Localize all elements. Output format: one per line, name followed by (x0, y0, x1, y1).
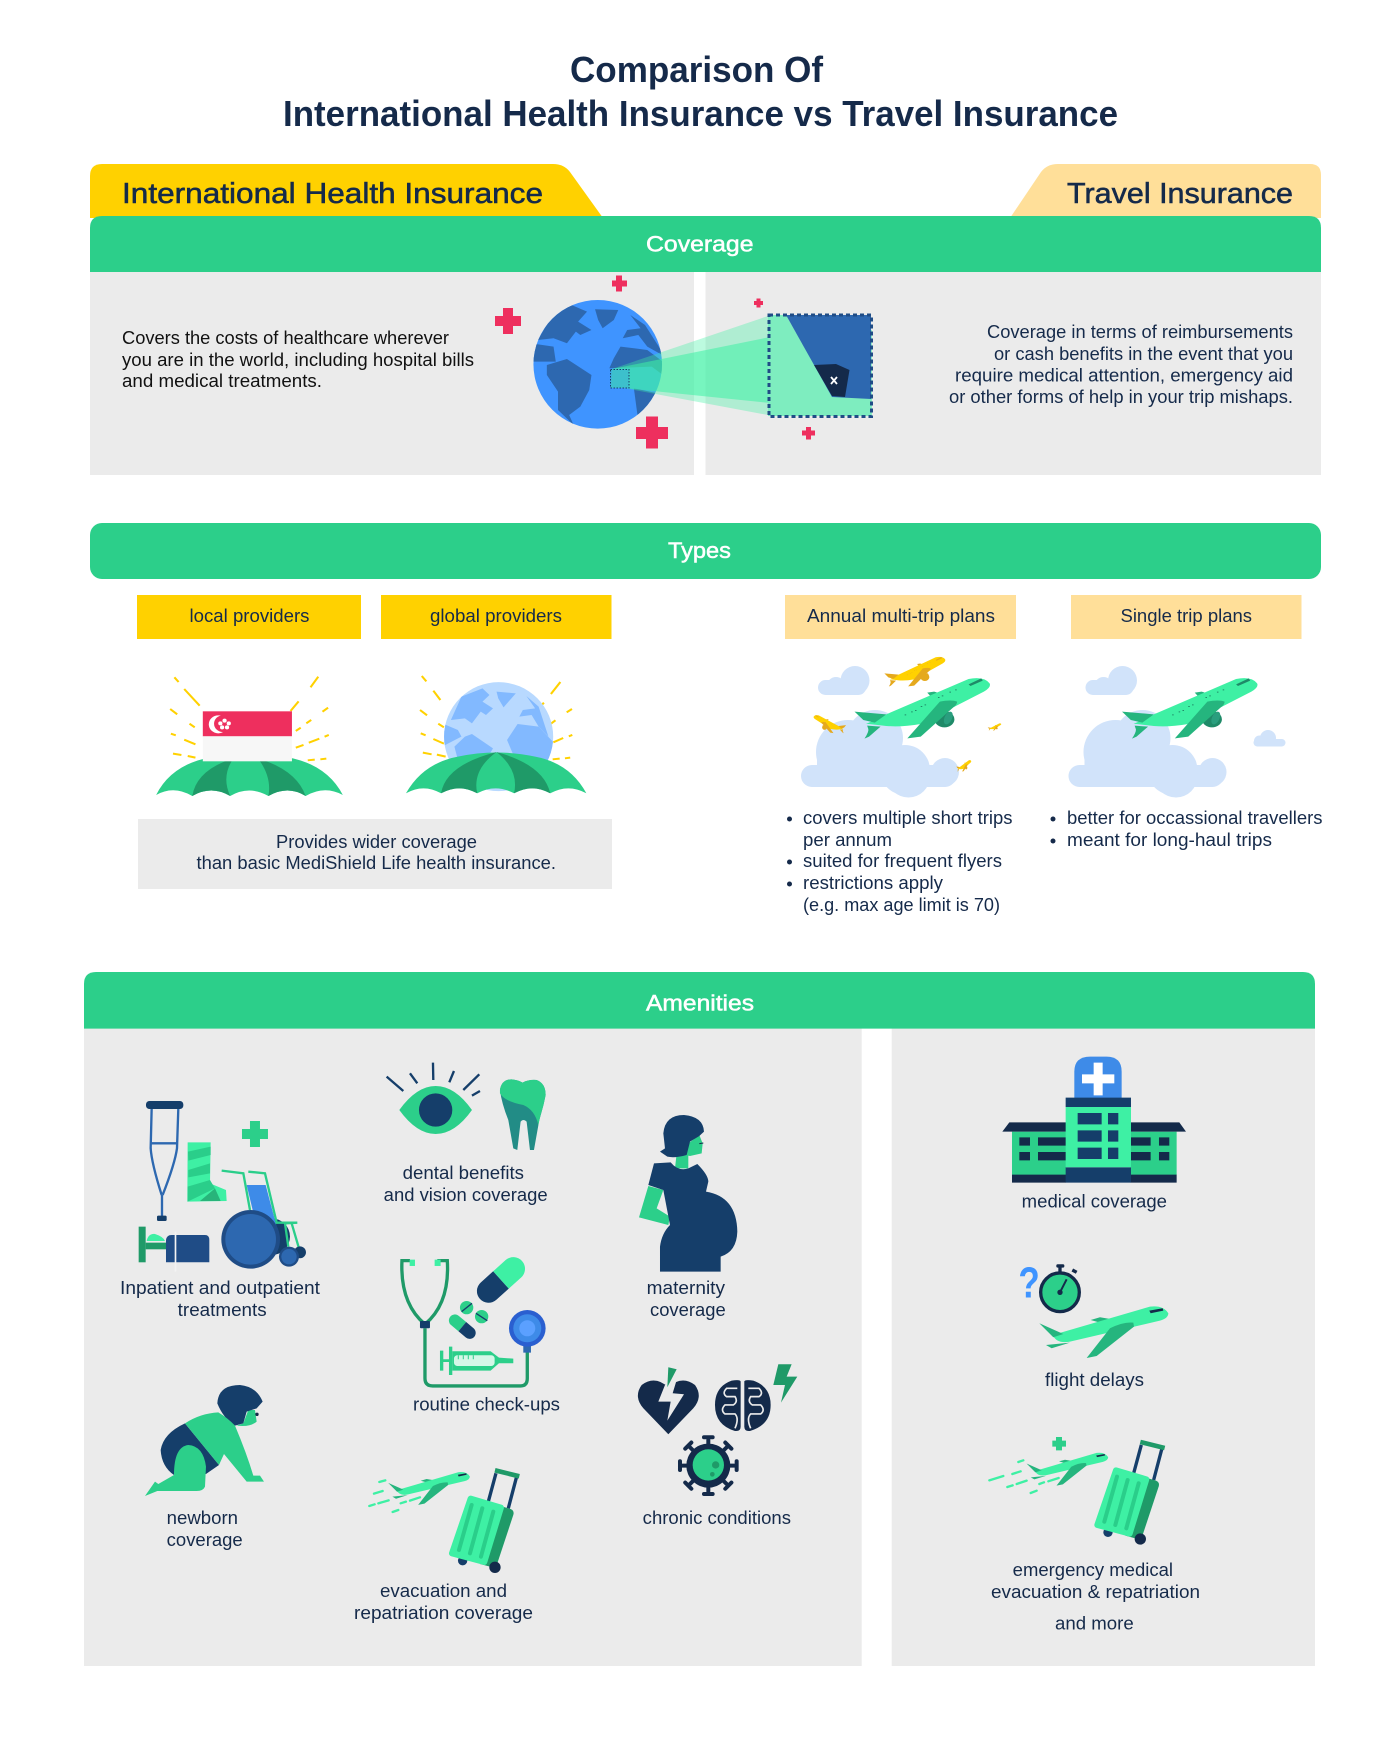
list: single trip features: meant for long-haul trips (1067, 830, 1272, 850)
label: maternity coverage: maternity (647, 1278, 725, 1298)
icon: broken heart (638, 1367, 699, 1434)
icon: small capsule (446, 1312, 478, 1341)
list: single trip features (1050, 808, 1322, 850)
icon: stethoscope (402, 1260, 546, 1386)
text: coverage international: and medical treatments. (122, 371, 322, 391)
label: routine check-ups: routine check-ups (413, 1394, 560, 1414)
icon: syringe (440, 1347, 513, 1375)
text: coverage travel: require medical attention, emergency aid (955, 366, 1293, 386)
title (283, 49, 1118, 134)
note: provides wider coverage (138, 819, 612, 889)
title: Comparison Of (570, 49, 824, 90)
label: local providers: local providers (190, 606, 310, 626)
label: inpatient and outpatient treatments (120, 1278, 320, 1320)
label: chronic conditions: chronic conditions (643, 1508, 791, 1528)
icon: leg cast (187, 1142, 227, 1202)
icon: clouds (801, 666, 959, 798)
icon: annual trip planes and clouds (801, 657, 1001, 798)
icon: crawling baby (145, 1385, 264, 1496)
text: coverage international (122, 328, 474, 391)
icon: question mark: ? (1018, 1258, 1040, 1307)
icon: light beam (610, 316, 872, 416)
icon: medical evacuation plane and suitcase (989, 1437, 1165, 1545)
bar: coverage: Coverage (646, 232, 754, 256)
icon: stopwatch (1041, 1264, 1079, 1312)
label: annual multi-trip plans (785, 595, 1016, 639)
label: maternity coverage: coverage (650, 1300, 726, 1320)
label: maternity coverage (647, 1278, 726, 1320)
icon: globe (531, 300, 665, 429)
note: provides wider coverage: Provides wider coverage (276, 832, 477, 852)
text: coverage travel (949, 322, 1293, 407)
icon: eye (387, 1063, 480, 1134)
tab: international health insurance: International Health Insurance (122, 178, 543, 210)
panel: amenities right (892, 1028, 1315, 1666)
icon: green cross (242, 1121, 268, 1147)
label: global providers (381, 595, 612, 639)
icon: singapore flag on umbrella (156, 677, 343, 796)
label: single trip plans (1071, 595, 1302, 639)
icon: globe with magnified map (495, 276, 872, 448)
icon: virus (680, 1437, 737, 1494)
label: global providers: global providers (430, 606, 562, 626)
icon: tooth (500, 1079, 546, 1150)
icon: single trip plane and clouds (1068, 666, 1286, 798)
label: inpatient and outpatient treatments: treatments (178, 1300, 267, 1320)
title: International Health Insurance vs Travel Insurance (283, 93, 1118, 134)
list: single trip features: better for occassional travellers (1067, 808, 1322, 828)
icon: globe on umbrella (406, 676, 586, 793)
label: single trip plans: Single trip plans (1120, 606, 1252, 626)
list: annual multi-trip features: per annum (803, 830, 892, 850)
label: emergency medical evacuation and repatriation: and more (1055, 1614, 1134, 1634)
panel: coverage right (706, 272, 1321, 475)
bar: amenities: Amenities (646, 991, 754, 1016)
label: emergency medical evacuation and repatriation (991, 1560, 1200, 1634)
list: annual multi-trip features: covers multiple short trips (803, 808, 1012, 828)
tab: travel insurance: Travel Insurance (1067, 178, 1293, 210)
list: annual multi-trip features: suited for frequent flyers (803, 851, 1002, 871)
bar: coverage (90, 216, 1321, 272)
label: flight delays: flight delays (1045, 1370, 1144, 1390)
icon: bed (139, 1227, 209, 1272)
label: local providers (137, 595, 361, 639)
bar: types (90, 523, 1321, 579)
label: evacuation and repatriation coverage (354, 1581, 533, 1623)
label: annual multi-trip plans: Annual multi-trip plans (807, 606, 995, 626)
icon: evacuation plane and suitcase (369, 1470, 519, 1573)
icon: plane (1039, 1306, 1168, 1358)
icon: pregnant woman (639, 1115, 737, 1272)
list: annual multi-trip features (787, 808, 1012, 915)
icon: wheelchair (221, 1171, 306, 1269)
text: coverage travel: or cash benefits in the event that you (994, 344, 1293, 364)
tab: travel insurance (1010, 164, 1321, 218)
label: evacuation and repatriation coverage: evacuation and (380, 1581, 507, 1601)
text: coverage international: you are in the world, including hospital bills (122, 350, 474, 370)
tab: international health insurance (90, 164, 603, 218)
text: coverage travel: Coverage in terms of reimbursements (987, 322, 1293, 342)
panel: amenities left (84, 1028, 862, 1666)
icon: tablets (460, 1301, 488, 1323)
list: annual multi-trip features: (e.g. max age limit is 70) (803, 895, 1000, 915)
icon: red crosses (495, 276, 815, 448)
label: dental and vision (384, 1163, 548, 1205)
bar: amenities (84, 972, 1315, 1029)
label: dental and vision: and vision coverage (384, 1185, 548, 1205)
panel: coverage left (90, 272, 694, 475)
icon: stopwatch and plane (1018, 1258, 1168, 1358)
icon: planes (814, 657, 1001, 772)
icon: inpatient and outpatient equipment (139, 1101, 306, 1272)
label: emergency medical evacuation and repatriation: evacuation & repatriation (991, 1582, 1200, 1602)
bar: types: Types (668, 538, 731, 563)
label: emergency medical evacuation and repatriation: emergency medical (1013, 1560, 1173, 1580)
icon: eye and tooth (387, 1063, 546, 1150)
icon: brain (715, 1380, 771, 1431)
label: newborn coverage: newborn (167, 1508, 238, 1528)
icon: magnified map (768, 315, 872, 416)
icon: clouds (1068, 666, 1286, 798)
list: annual multi-trip features: restrictions apply (803, 873, 943, 893)
text: coverage travel: or other forms of help in your trip mishaps. (949, 387, 1293, 407)
icon: crutch (146, 1101, 183, 1221)
icon: large capsule (472, 1252, 530, 1308)
icon: stethoscope, pills and syringe (402, 1252, 546, 1386)
icon: lightning bolt (773, 1364, 797, 1403)
icon: hospital (1002, 1057, 1186, 1183)
label: medical coverage: medical coverage (1022, 1192, 1167, 1212)
icon: plane (1122, 678, 1258, 739)
icon: chronic conditions (638, 1364, 797, 1494)
label: newborn coverage (167, 1508, 243, 1550)
text: coverage international: Covers the costs of healthcare wherever (122, 328, 449, 348)
label: newborn coverage: coverage (167, 1530, 243, 1550)
label: evacuation and repatriation coverage: repatriation coverage (354, 1603, 533, 1623)
label: inpatient and outpatient treatments: Inpatient and outpatient (120, 1278, 320, 1298)
note: provides wider coverage: than basic MediShield Life health insurance. (196, 853, 556, 873)
label: dental and vision: dental benefits (403, 1163, 524, 1183)
